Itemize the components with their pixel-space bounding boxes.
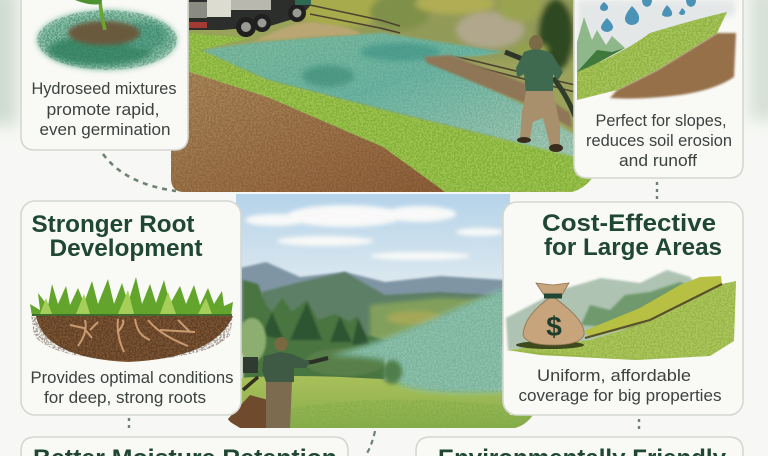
forest hillside [295,0,600,71]
truck [189,0,311,37]
text: germination description: Hydroseed mixtures [32,80,176,98]
connector: curved dashed line [103,154,176,191]
text: erosion description [586,112,732,170]
text: cost description [518,367,722,405]
text: root description: Provides optimal conditions [30,369,234,387]
clouds [245,205,504,260]
heading: stronger root development [32,211,203,262]
text: erosion description: Perfect for slopes, [596,112,726,130]
forest [238,280,385,380]
connector: dotted line from slope card [656,182,658,199]
connector: dotted line from cost card [638,419,640,432]
panel: stronger root development [21,201,241,415]
bare soil strip [424,55,572,128]
panel: rapid germination [21,0,188,150]
worker with hose [505,35,575,152]
icon: money bag on sloped field [506,270,736,360]
sprayer worker [243,337,328,428]
heading: cost-effective [542,210,722,261]
heading: cost-effective: for Large Areas [544,234,722,261]
hydroseed coverage [200,33,575,160]
panel: environmentally friendly [416,437,743,456]
text: erosion description: reduces soil erosion [586,132,732,150]
grass bank [189,33,600,192]
soil patch [227,395,268,428]
heading: stronger root development: Stronger Root [32,211,194,238]
text: erosion description: and runoff [619,152,698,170]
heading: stronger root development: Development [50,235,203,262]
panel: erosion control [574,0,743,178]
hydroseed spray cloud [330,288,505,393]
brown soil foreground [171,72,445,192]
panel: cost-effective for large areas [503,202,743,415]
meadow [241,376,540,430]
money bag: $ [546,311,562,342]
connector: dotted line from root card [128,418,130,431]
roots [70,319,195,352]
text: root description: for deep, strong roots [44,389,206,407]
text: germination description [32,80,176,139]
panel: better moisture retention [21,437,348,456]
icon: water drops [600,0,696,32]
far fields [368,296,478,340]
fence [310,5,575,92]
mountains [240,262,505,330]
text: cost description: coverage for big properties [518,387,722,405]
icon: seedling in hydroseed mulch [37,0,177,70]
connector: dashed line from lower photo [366,431,375,455]
text: root description [30,369,234,407]
photo: worker spraying hydroseed on a slope beside a truck [171,0,600,192]
icon: rain on grassy slope [577,0,736,100]
heading: cost-effective: Cost-Effective [542,210,716,237]
text: germination description: promote rapid, [46,101,160,119]
text: cost description: Uniform, affordable [537,367,691,385]
money bag [523,283,584,345]
photo: worker spraying a mountain meadow [227,194,545,430]
icon: grass and roots cross-section [30,277,233,362]
text: germination description: even germination [40,121,170,139]
gravel patch near truck [255,22,362,41]
